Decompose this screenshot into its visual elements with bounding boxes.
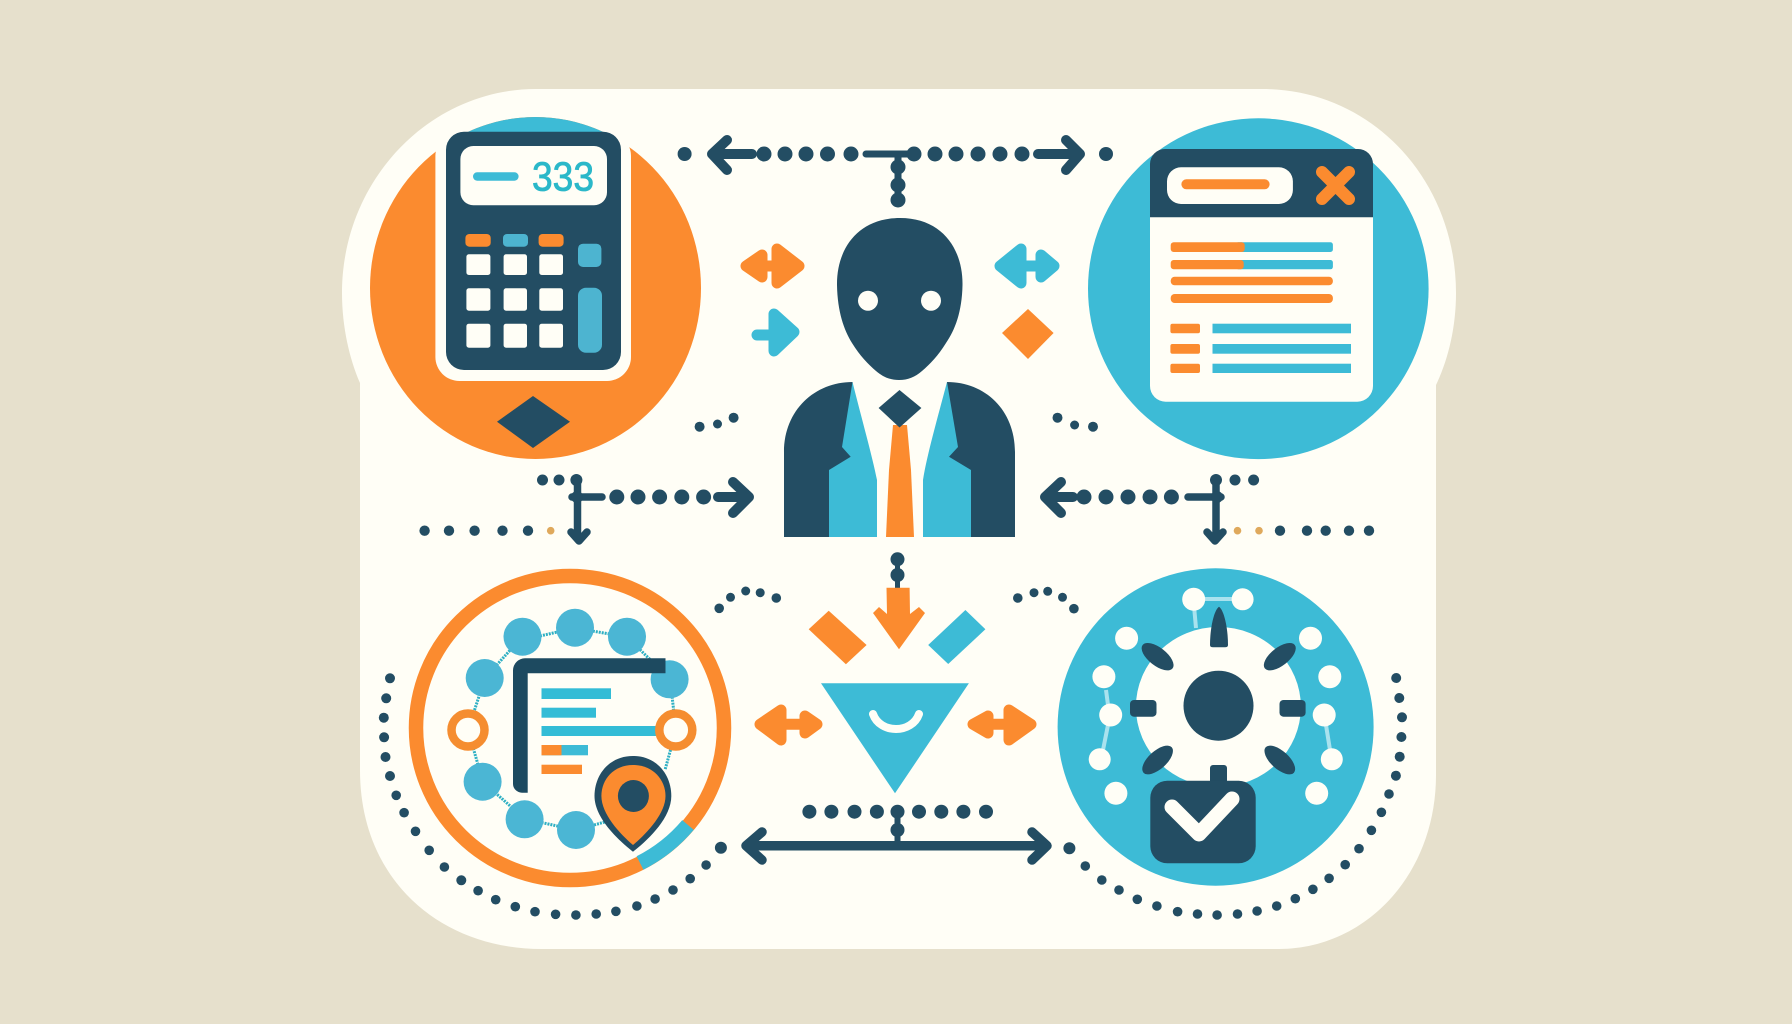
blue network nodes — [464, 609, 689, 849]
panel: central rounded card — [342, 89, 1456, 949]
network connectors — [468, 628, 676, 830]
icon: blue rectangle — [928, 610, 985, 664]
icon: map pin — [594, 756, 671, 852]
gear white disc — [1136, 627, 1301, 787]
blue ring segment — [640, 825, 688, 863]
gear hub — [1184, 671, 1254, 741]
suit jacket left — [784, 382, 877, 537]
dots: left row — [419, 526, 554, 536]
icon: orange diamond — [1002, 309, 1054, 359]
icon: person with suit — [784, 218, 1015, 537]
calculator keys — [465, 234, 602, 353]
checkmark badge — [1150, 781, 1256, 863]
dots: right small trio — [1052, 413, 1098, 432]
arrow: right dotted connector to person — [1045, 474, 1259, 541]
dots: lower right small arc — [1013, 587, 1079, 614]
necktie — [886, 425, 914, 537]
tie knot diamond — [879, 390, 921, 428]
icon: settings gear with checkmark in blue circle — [1058, 568, 1374, 886]
arrow: bottom connector with dots — [746, 805, 1047, 860]
document page — [513, 658, 666, 793]
dots: lower left small arc — [714, 586, 781, 613]
window title bar — [1150, 149, 1373, 217]
icon: orange rectangle — [809, 611, 867, 664]
calculator screen — [460, 146, 607, 205]
arrow: orange double arrow upper left — [746, 249, 799, 283]
icon: browser window in blue circle — [1088, 118, 1429, 459]
calculator screen: 333 — [532, 154, 594, 200]
orange ring nodes — [452, 714, 692, 746]
dots: left small trio — [695, 413, 739, 432]
infographic canvas — [342, 89, 1456, 949]
person head — [837, 218, 963, 380]
icon: document with map pin inside orange ring — [416, 576, 724, 880]
dots: lower left arc — [379, 673, 727, 920]
dots: lower right arc — [1063, 673, 1407, 920]
dots: right row — [1234, 526, 1374, 536]
arrow: orange double arrow lower right — [973, 710, 1031, 740]
suit jacket right — [923, 382, 1015, 537]
white network nodes — [1089, 588, 1343, 805]
arrow: orange double arrow lower left — [760, 710, 817, 740]
node connectors — [1103, 599, 1330, 750]
arrow: blue arrow left — [757, 314, 794, 351]
arrow: left dotted connector to person — [537, 474, 749, 541]
icon: calculator in orange circle — [370, 117, 701, 459]
gear spokes — [1130, 607, 1306, 785]
person eyes — [858, 291, 941, 311]
diamond under calculator — [497, 396, 570, 448]
icon: blue funnel triangle with smile — [821, 683, 969, 793]
arrow: beaded stem into orange down arrow — [873, 552, 925, 649]
orange ring — [416, 576, 724, 880]
arrow: blue double arrow upper right — [1000, 249, 1054, 283]
window text lines — [1170, 242, 1351, 373]
arrow: top dotted connector — [678, 140, 1113, 208]
